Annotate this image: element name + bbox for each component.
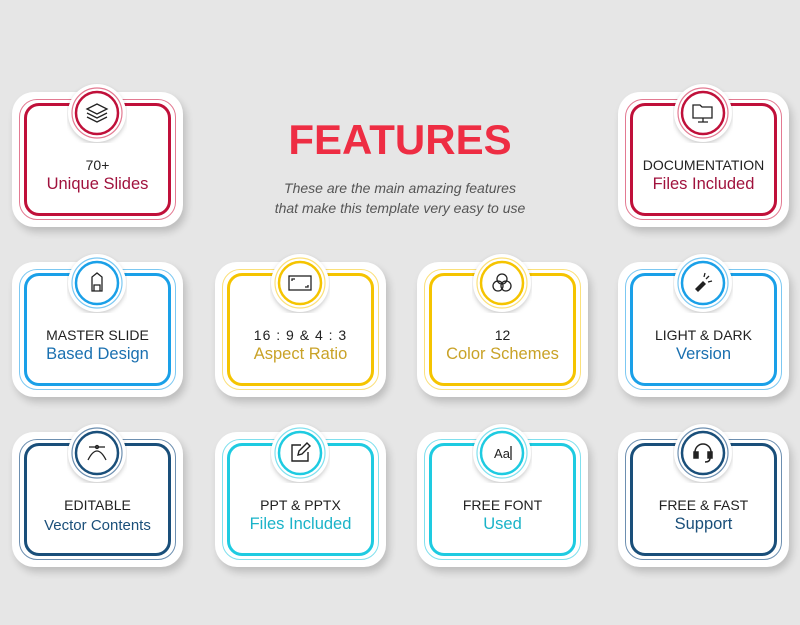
card: aspect ratio bbox=[215, 262, 386, 397]
icon: headset bbox=[673, 424, 733, 483]
subtitle: These are the main amazing features bbox=[284, 180, 516, 196]
icon: layers bbox=[67, 84, 127, 143]
card: master slide bbox=[12, 262, 183, 397]
card: documentation bbox=[618, 92, 789, 227]
card: documentation: Files Included bbox=[653, 175, 754, 193]
card: editable bbox=[12, 432, 183, 567]
card: light dark bbox=[618, 262, 789, 397]
icon: circles bbox=[472, 254, 532, 313]
card: editable: EDITABLE bbox=[64, 497, 131, 513]
icon: vector bbox=[67, 424, 127, 483]
icon: font bbox=[472, 424, 532, 483]
card: support: FREE & FAST bbox=[659, 497, 748, 513]
card: support: Support bbox=[675, 515, 732, 533]
card: unique slides: 70+ bbox=[86, 157, 109, 173]
icon: folder bbox=[673, 84, 733, 143]
card: editable: Vector Contents bbox=[44, 517, 151, 534]
icon: master bbox=[67, 254, 127, 313]
card: master slide: MASTER SLIDE bbox=[46, 327, 149, 343]
card: light dark: LIGHT & DARK bbox=[655, 327, 752, 343]
subtitle bbox=[275, 180, 525, 216]
card: master slide: Based Design bbox=[46, 345, 149, 363]
card: free font bbox=[417, 432, 588, 567]
card: free font: Used bbox=[483, 515, 522, 533]
card: light dark: Version bbox=[676, 345, 731, 363]
subtitle: that make this template very easy to use bbox=[275, 200, 525, 216]
card: color schemes bbox=[417, 262, 588, 397]
icon: screen bbox=[270, 254, 330, 313]
card: free font: FREE FONT bbox=[463, 497, 542, 513]
title: FEATURES bbox=[288, 116, 512, 163]
card: color schemes: Color Schemes bbox=[446, 345, 559, 363]
card: ppt: Files Included bbox=[250, 515, 351, 533]
icon: font: Aa bbox=[494, 446, 511, 461]
card: documentation: DOCUMENTATION bbox=[643, 157, 764, 173]
card: ppt bbox=[215, 432, 386, 567]
icon: edit bbox=[270, 424, 330, 483]
card: aspect ratio: Aspect Ratio bbox=[254, 345, 347, 363]
icon: flashlight bbox=[673, 254, 733, 313]
card: unique slides bbox=[12, 92, 183, 227]
card: support bbox=[618, 432, 789, 567]
card: color schemes: 12 bbox=[495, 327, 510, 343]
card: ppt: PPT & PPTX bbox=[260, 497, 341, 513]
card: aspect ratio: 16 : 9 & 4 : 3 bbox=[254, 327, 347, 343]
card: unique slides: Unique Slides bbox=[47, 175, 148, 193]
